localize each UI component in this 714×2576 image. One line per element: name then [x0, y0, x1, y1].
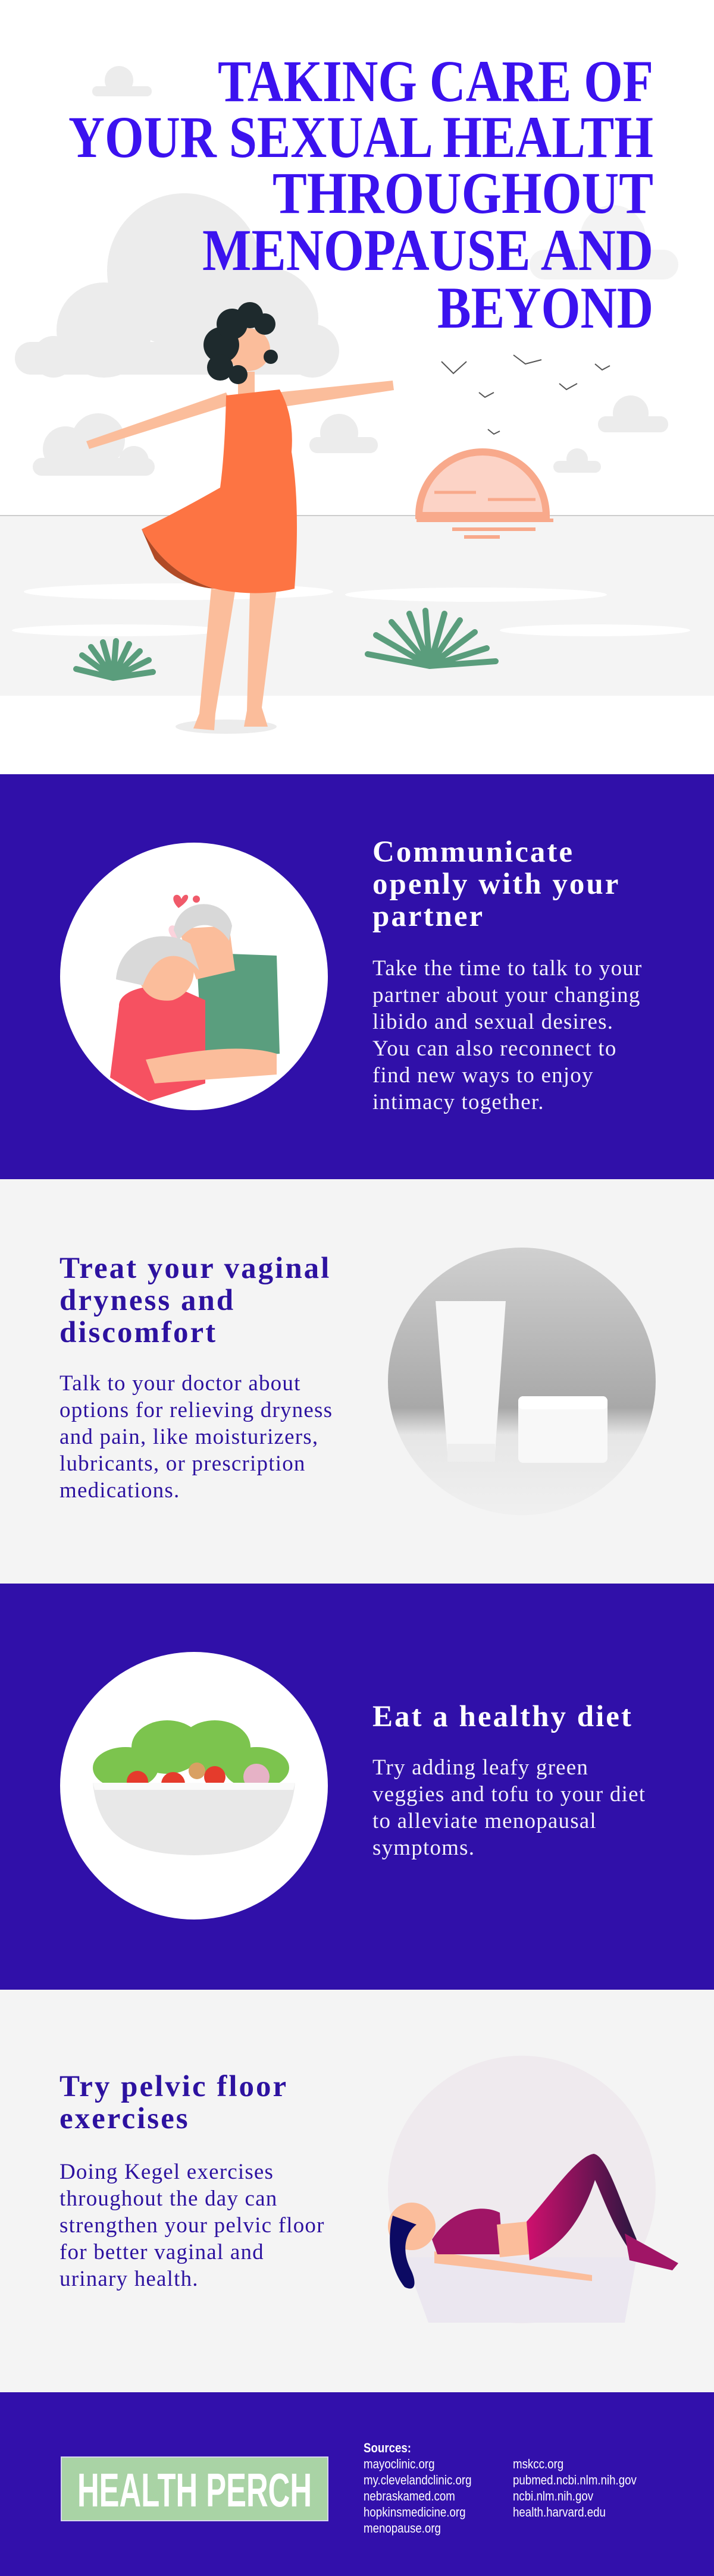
sources list: mskcc.org [513, 2456, 563, 2471]
text: communicate body: find new ways to enjoy [372, 1063, 594, 1088]
bushes [76, 611, 496, 678]
heading: pelvic floor [60, 2070, 288, 2135]
text: communicate body: You can also reconnect to [372, 1036, 617, 1061]
heading: communicate: Communicate [372, 835, 574, 869]
sun [416, 452, 553, 537]
text: communicate body: intimacy together. [372, 1090, 544, 1114]
text: dryness body: medications. [60, 1478, 180, 1503]
text: pelvic body: Doing Kegel exercises [60, 2160, 274, 2184]
clouds [15, 66, 668, 476]
text: pelvic body: throughout the day can [60, 2187, 278, 2211]
icon: couple illustration [60, 843, 328, 1110]
text: pelvic body: strengthen your pelvic floor [60, 2213, 325, 2238]
icon: salad bowl [60, 1652, 328, 1920]
text: communicate body: Take the time to talk to your [372, 956, 643, 981]
title [68, 48, 653, 341]
icon: woman exercising [388, 2056, 678, 2323]
heading: treat dryness: Treat your vaginal [60, 1252, 331, 1285]
heading: communicate: openly with your [372, 868, 620, 901]
heading: communicate [372, 835, 620, 933]
text: diet body [372, 1755, 646, 1860]
text: diet body: symptoms. [372, 1836, 475, 1860]
woman dancing [86, 302, 394, 734]
text: dryness body: Talk to your doctor about [60, 1371, 301, 1396]
sources list: Sources: [364, 2440, 411, 2455]
sources list: my.clevelandclinic.org [364, 2473, 472, 2487]
text: communicate body: libido and sexual desires. [372, 1010, 613, 1034]
text: dryness body: and pain, like moisturizers, [60, 1425, 318, 1449]
text: dryness body: lubricants, or prescription [60, 1452, 306, 1476]
sources list: nebraskamed.com [364, 2489, 455, 2503]
sources list: mayoclinic.org [364, 2456, 435, 2471]
text: pelvic body: for better vaginal and [60, 2240, 264, 2264]
icon: tube and jar [388, 1248, 656, 1483]
ground [0, 516, 714, 774]
heading: healthy diet: Eat a healthy diet [372, 1700, 633, 1733]
panel: communicate [0, 774, 714, 1179]
text: pelvic body [60, 2160, 325, 2291]
sources list: ncbi.nlm.nih.gov [513, 2489, 593, 2503]
heading: pelvic floor: exercises [60, 2102, 190, 2135]
text: diet body: to alleviate menopausal [372, 1809, 597, 1833]
hero section [0, 0, 714, 774]
text: communicate body: partner about your changing [372, 983, 641, 1007]
title: THROUGHOUT [273, 160, 653, 226]
heading: treat dryness: dryness and [60, 1284, 235, 1317]
heading: treat dryness: discomfort [60, 1316, 217, 1349]
sources list: hopkinsmedicine.org [364, 2505, 466, 2520]
sources list [364, 2440, 637, 2536]
panel: pelvic floor [0, 1990, 714, 2392]
title: BEYOND [437, 275, 653, 341]
sources list: health.harvard.edu [513, 2505, 606, 2520]
panel: vaginal dryness [0, 1179, 714, 1584]
heading: communicate: partner [372, 900, 484, 933]
text: diet body: veggies and tofu to your diet [372, 1782, 646, 1807]
text: dryness body: options for relieving dryness [60, 1398, 333, 1422]
footer [0, 2392, 714, 2576]
sources list: menopause.org [364, 2521, 441, 2536]
text: pelvic body: urinary health. [60, 2267, 199, 2291]
panel: healthy diet [0, 1584, 714, 1990]
sources list: pubmed.ncbi.nlm.nih.gov [513, 2473, 637, 2487]
heading: pelvic floor: Try pelvic floor [60, 2070, 288, 2103]
text: diet body: Try adding leafy green [372, 1755, 588, 1780]
birds [441, 355, 610, 434]
title: MENOPAUSE AND [202, 217, 653, 283]
heading: treat dryness [60, 1252, 331, 1349]
text: dryness body [60, 1371, 333, 1503]
text: communicate body [372, 956, 643, 1114]
